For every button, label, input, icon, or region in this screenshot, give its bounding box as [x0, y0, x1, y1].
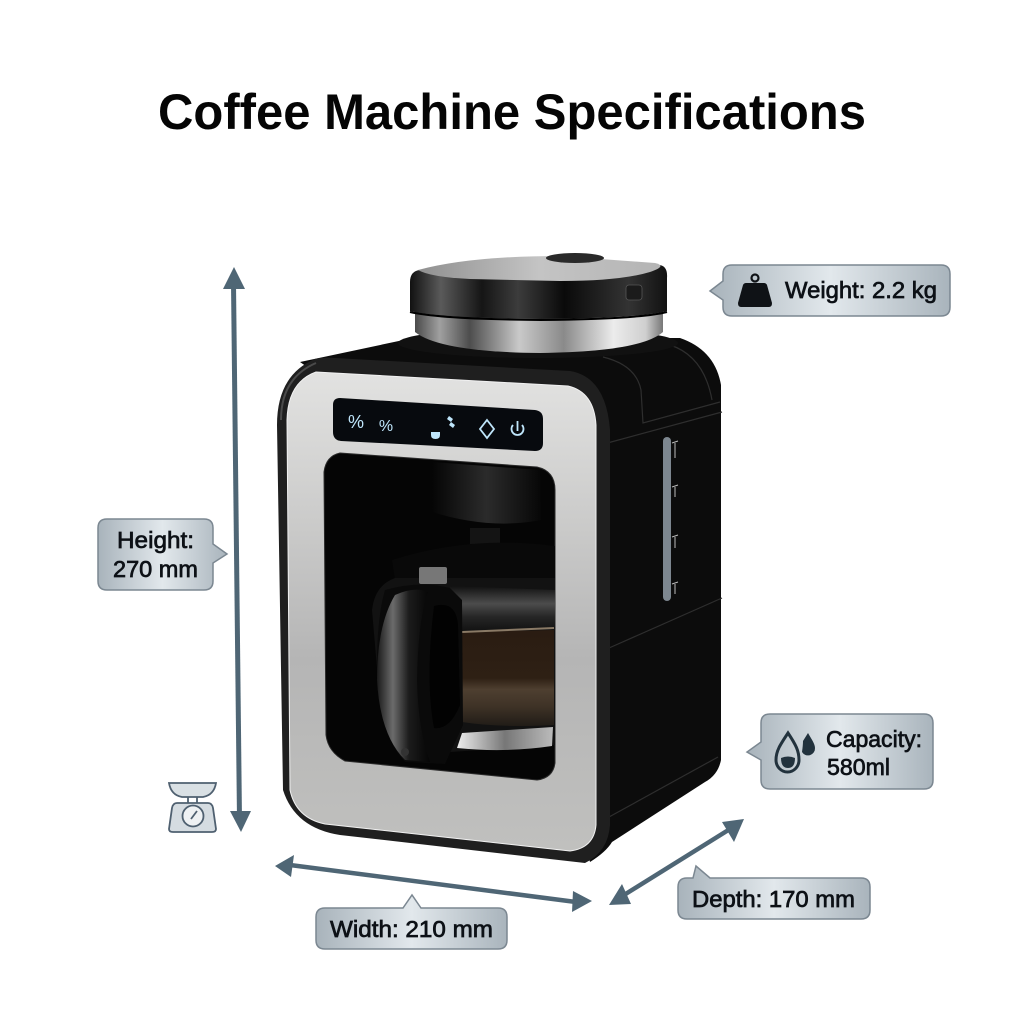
icon: water drops	[776, 733, 815, 772]
callout: capacity: 580ml	[827, 754, 890, 780]
callout: height: 270 mm	[113, 556, 198, 582]
callout: capacity: Capacity:	[826, 726, 922, 752]
height arrow	[223, 267, 251, 832]
carafe handle	[377, 567, 463, 764]
front frame	[277, 358, 610, 863]
top cover seams	[600, 345, 722, 820]
panel icons: %	[348, 412, 364, 432]
width arrow	[275, 855, 592, 912]
lid switch	[626, 285, 642, 300]
panel icons: %	[379, 418, 393, 435]
callout: capacity	[747, 714, 933, 789]
carafe glass	[372, 578, 555, 752]
coffee	[462, 630, 554, 726]
callout: depth: Depth: 170 mm	[692, 886, 855, 912]
callout: width	[316, 895, 507, 949]
icon: weight	[738, 274, 772, 307]
grinder steel band	[415, 308, 663, 353]
callout: width: Width: 210 mm	[330, 916, 493, 942]
title: Coffee Machine Specifications	[158, 84, 866, 140]
callout: height	[98, 519, 227, 590]
stainless front panel	[287, 372, 596, 851]
callout: height: Height:	[117, 527, 194, 553]
brew head	[432, 462, 541, 524]
callout: depth	[678, 866, 870, 919]
callout: weight: Weight: 2.2 kg	[785, 277, 937, 303]
control panel	[333, 398, 543, 451]
callout: weight	[710, 265, 950, 316]
lid vent	[546, 253, 604, 263]
machine body side	[300, 338, 721, 862]
grinder lid top	[418, 256, 660, 281]
grinder base collar	[398, 328, 678, 358]
water level gauge	[663, 437, 678, 601]
carafe base ring	[457, 727, 553, 750]
panel icons	[348, 412, 455, 439]
depth arrow	[609, 819, 744, 905]
brew window	[324, 453, 555, 780]
icon: kitchen scale	[169, 783, 216, 832]
coffee machine	[277, 253, 722, 863]
grinder lid band	[410, 265, 667, 319]
